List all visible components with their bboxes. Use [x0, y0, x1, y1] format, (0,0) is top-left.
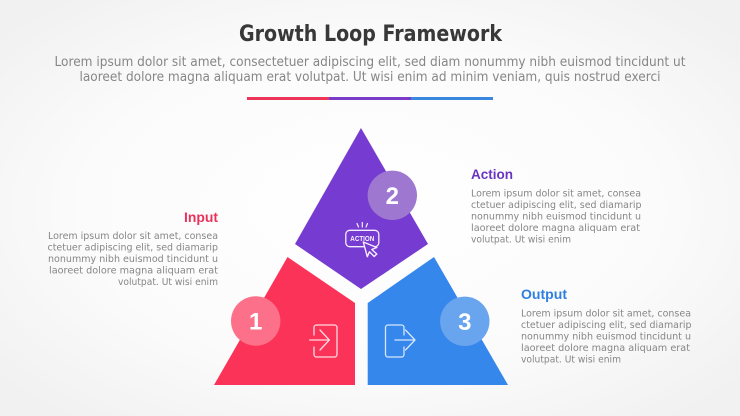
text block: action: volutpat. Ut wisi enim: [471, 234, 571, 246]
icon: action button with cursor: [346, 222, 379, 257]
badge 2: 2: [386, 183, 399, 210]
subtitle text: Lorem ipsum dolor sit amet, consectetuer adipiscing elit, sed diam nonummy nibh euismod tincidunt ut: [54, 55, 686, 70]
text block: output: Lorem ipsum dolor sit amet, consea: [521, 308, 691, 320]
badge 3: 3: [458, 309, 471, 336]
subtitle text: [54, 55, 686, 85]
title: Growth Loop Framework: [239, 22, 503, 47]
text block: input: ctetuer adipiscing elit, sed diamarip: [48, 242, 218, 254]
text block: action: [471, 166, 642, 246]
text block: output: Output: [521, 286, 567, 302]
text block: input: Lorem ipsum dolor sit amet, consea: [48, 231, 218, 242]
badge 2: [368, 171, 417, 220]
text block: action: Action: [471, 166, 513, 182]
icon: exit door: [386, 325, 415, 357]
text block: output: laoreet dolore magna aliquam erat: [521, 343, 690, 354]
text block: action: Lorem ipsum dolor sit amet, consea: [471, 188, 641, 200]
text block: action: ctetuer adipiscing elit, sed diamarip: [471, 200, 642, 211]
icon: action button with cursor: ACTION: [350, 236, 374, 243]
text block: input: volutpat. Ut wisi enim: [118, 277, 218, 288]
text block: output: volutpat. Ut wisi enim: [521, 354, 621, 366]
text block: action: laoreet dolore magna aliquam erat: [471, 223, 640, 234]
text block: input: nonummy nibh euismod tincidunt u: [48, 254, 218, 265]
badge 3: [440, 297, 489, 346]
text block: input: Input: [184, 209, 218, 225]
badge 1: 1: [249, 308, 262, 336]
badge 1: [231, 296, 280, 346]
subtitle text: laoreet dolore magna aliquam erat volutpat. Ut wisi enim ad minim veniam, quis nostrud exerci: [80, 70, 660, 85]
icon: enter door: [310, 325, 337, 357]
panel: action segment: [295, 128, 428, 289]
text block: input: [48, 209, 218, 288]
text block: output: [521, 286, 692, 366]
text block: action: nonummy nibh euismod tincidunt u: [471, 212, 641, 222]
text block: output: ctetuer adipiscing elit, sed diamarip: [521, 320, 692, 331]
panel: input segment: [214, 257, 355, 385]
panel: output segment: [368, 257, 508, 385]
text block: output: nonummy nibh euismod tincidunt u: [521, 332, 691, 342]
text block: input: laoreet dolore magna aliquam erat: [49, 266, 218, 276]
tri-colour divider: [247, 97, 493, 100]
